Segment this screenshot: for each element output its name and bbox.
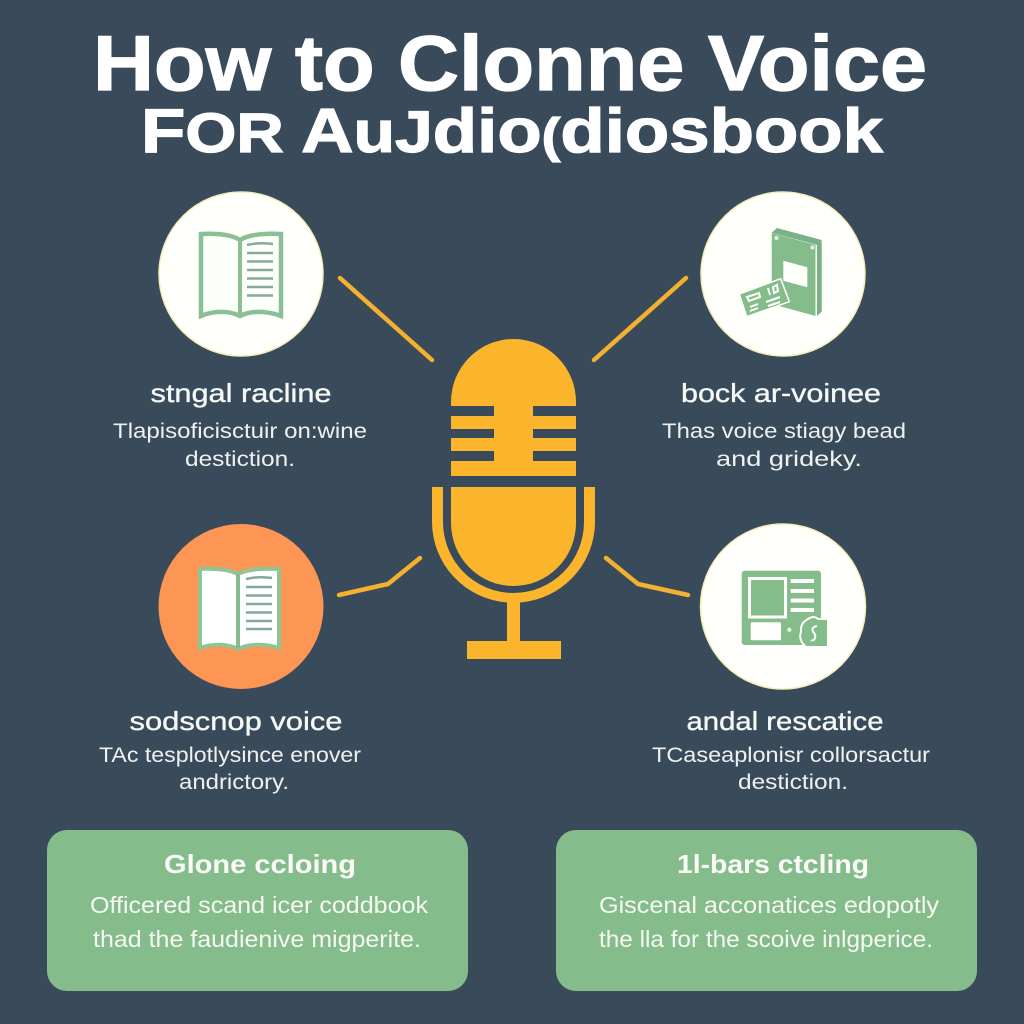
step description: and grideky. [716,448,862,471]
step description: destiction. [738,771,848,794]
callout body [90,892,429,952]
icon: microphone [432,339,595,659]
step description: andrictory. [179,771,289,794]
step description: Tlapisoficisctuir on:wine [113,420,367,443]
step description: destiction. [185,448,295,471]
title: FOR AuJdio (diosbook [141,97,884,166]
panel: bottom-right step [652,524,930,794]
icon: document and money bag [700,524,866,689]
panel: top-right step [662,192,906,471]
step heading: bock ar-voinee [681,378,881,408]
step description [652,744,930,794]
title: How to Clonne Voice [93,19,927,107]
callout body: the lla for the scoive inlgperice. [599,926,933,952]
callout: right green box [556,830,977,991]
step description: Thas voice stiagy bead [662,420,906,443]
callout body [599,892,940,952]
callout body: thad the faudienive migperite. [93,926,421,952]
icon: book and card [701,192,865,356]
step description [99,744,361,794]
step heading: andal rescatice [686,706,884,736]
step description [113,420,367,471]
callout heading: 1l-bars ctcling [677,849,869,879]
panel: top-left step [113,192,367,471]
step heading: sodscnop voice [130,706,342,736]
step heading: stngal racline [150,378,332,408]
callout body: Giscenal acconatices edopotly [599,892,940,918]
step description: TAc tesplotlysince enover [99,744,361,767]
icon: open book [159,192,323,356]
icon: open book on orange [158,524,324,689]
callout body: Officered scand icer coddbook [90,892,429,918]
panel: bottom-left step [99,524,361,794]
callout: left green box [47,830,468,991]
step description: TCaseaplonisr collorsactur [652,744,930,767]
connector lines [339,278,688,595]
callout heading: Glone ccloing [164,849,356,879]
step description [662,420,906,471]
title [93,19,927,166]
